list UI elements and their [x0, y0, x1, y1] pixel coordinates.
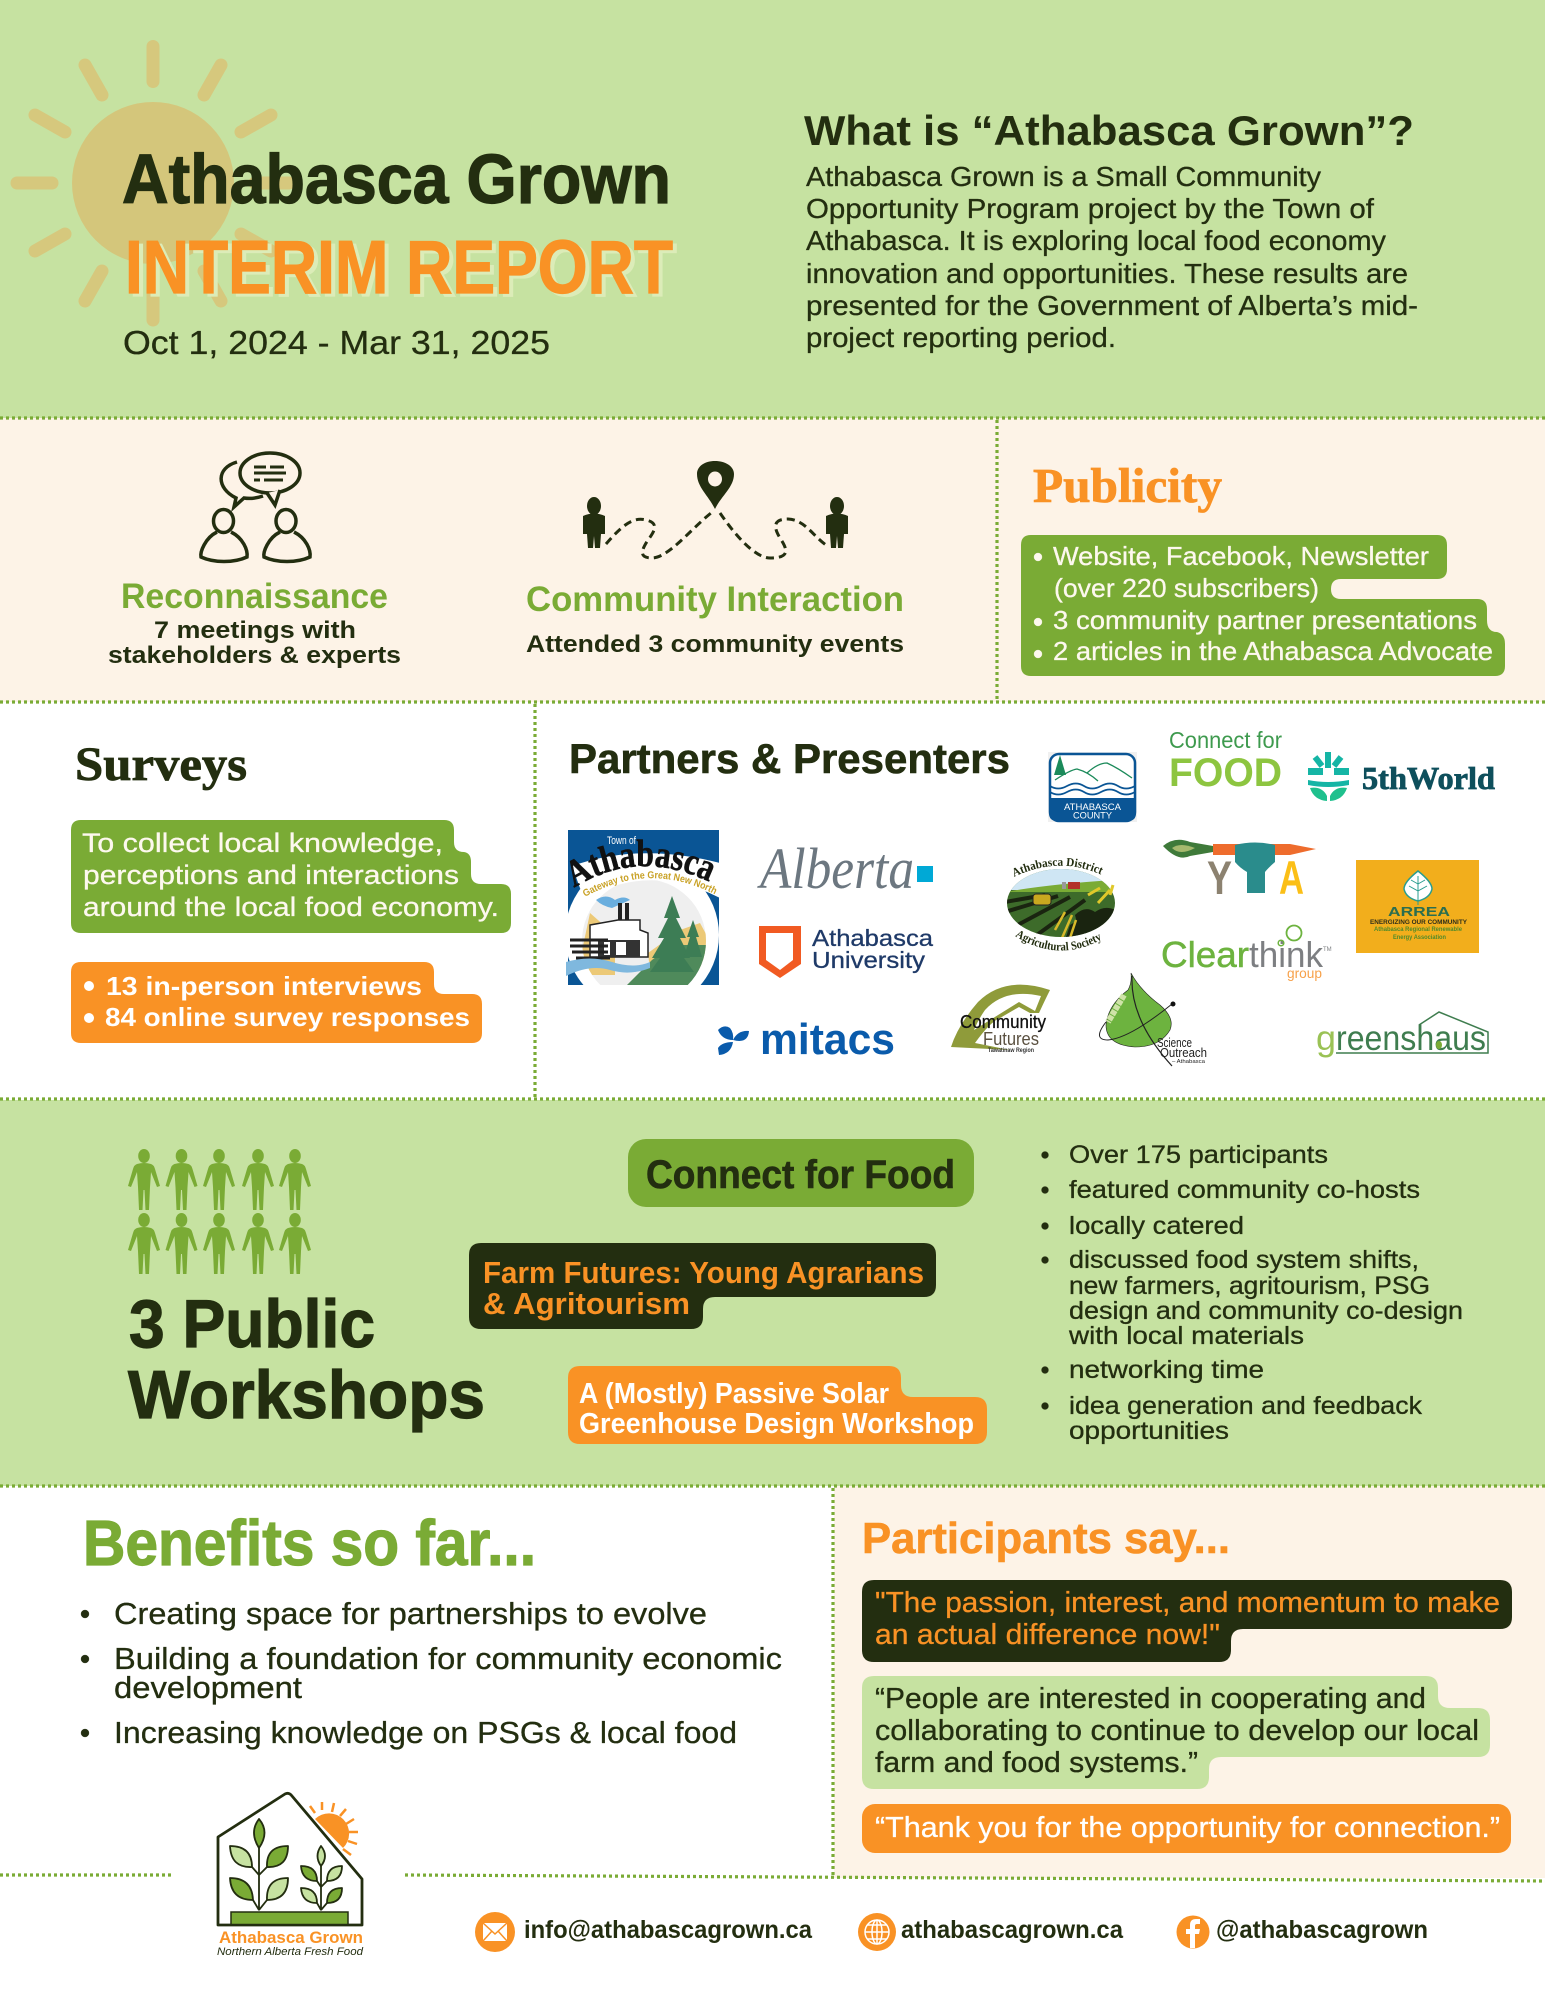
- logo: Athabasca University: University: [812, 947, 926, 973]
- logo: Athabasca University: Athabasca: [812, 925, 933, 951]
- publicity callout: 2 articles in the Athabasca Advocate: [1053, 636, 1493, 666]
- workshop details list: with local materials: [1068, 1322, 1304, 1350]
- workshop details list: Over 175 participants: [1069, 1141, 1328, 1169]
- logo: Science Outreach: – Athabasca: [1172, 1059, 1205, 1065]
- workshop: Connect for Food: Connect for Food: [646, 1153, 955, 1197]
- heading: participants say: Participants say...: [862, 1514, 1230, 1563]
- surveys numbers callout: [71, 962, 482, 1043]
- workshop details list: opportunities: [1069, 1417, 1229, 1445]
- logo: Athabasca County: [1048, 752, 1137, 822]
- logo: Science Outreach: Outreach: [1160, 1045, 1207, 1060]
- logo: Connect for Food: Connect for: [1169, 727, 1282, 753]
- workshop: Passive Solar Greenhouse: Greenhouse Design Workshop: [579, 1408, 974, 1440]
- quote: cooperating and collaborating: collaborating to continue to develop our local: [875, 1715, 1479, 1747]
- title: [122, 140, 677, 312]
- logo: Community Futures: Tawatinaw Region: [988, 1048, 1034, 1054]
- icon: map pin with dashed route and two people: [583, 461, 848, 558]
- logo: Connect for Food: [1169, 727, 1282, 795]
- surveys purpose callout: To collect local knowledge,: [82, 828, 443, 858]
- logo: YTA carrot fist: A: [1279, 851, 1304, 904]
- intro paragraph: Athabasca Grown is a Small Community: [806, 161, 1321, 192]
- intro paragraph: Athabasca. It is exploring local food economy: [806, 225, 1386, 256]
- heading: what is Athabasca Grown: What is “Athabasca Grown”?: [804, 107, 1414, 154]
- workshop details list: idea generation and feedback: [1069, 1392, 1423, 1420]
- contact: website: [858, 1913, 1124, 1951]
- logo: YTA carrot fist: Y: [1207, 851, 1232, 904]
- heading: partners and presenters: Partners & Presenters: [569, 735, 1010, 782]
- logo: Clearthink group: group: [1287, 965, 1322, 981]
- logo: Community Futures: [951, 985, 1050, 1054]
- logo: Athabasca County: ATHABASCA: [1064, 802, 1122, 813]
- heading: reconnaissance: Reconnaissance: [121, 577, 388, 616]
- community interaction text: Attended 3 community events: [526, 631, 904, 658]
- quote: passion and momentum: an actual difference now!": [875, 1619, 1220, 1651]
- heading: publicity: Publicity: [1033, 458, 1223, 513]
- logo: Town of Athabasca: Athabasca: [570, 839, 714, 888]
- icon: rows of people: [128, 1149, 311, 1274]
- logo: Athabasca Grown greenhouse: [217, 1793, 364, 1958]
- benefits list: development: [114, 1670, 302, 1705]
- benefits list: Increasing knowledge on PSGs & local food: [114, 1715, 737, 1750]
- workshop details list: [1042, 1141, 1463, 1445]
- quote: thank you: [862, 1804, 1511, 1853]
- surveys purpose callout: [71, 820, 511, 933]
- logo: ARREA: Athabasca Regional Renewable: [1374, 927, 1463, 933]
- logo: 5thWorld: [1308, 752, 1495, 801]
- workshop details list: discussed food system shifts,: [1069, 1246, 1419, 1274]
- workshop details list: networking time: [1069, 1356, 1264, 1384]
- heading: 3 public workshops: Workshops: [128, 1357, 485, 1433]
- workshop details list: new farmers, agritourism, PSG: [1069, 1272, 1430, 1300]
- benefits list: [81, 1596, 782, 1750]
- logo: Athabasca University: [759, 925, 933, 978]
- quote: cooperating and collaborating: farm and food systems.”: [875, 1747, 1198, 1779]
- logo: Community Futures: Community: [960, 1012, 1046, 1032]
- surveys purpose callout: perceptions and interactions: [83, 860, 459, 890]
- cream band panel: [0, 418, 1545, 702]
- logo: Science Outreach: Science: [1157, 1035, 1192, 1050]
- logo: mitacs: mitacs: [760, 1015, 895, 1064]
- logo: greenshaus: reenshaus: [1336, 1019, 1486, 1058]
- heading: benefits so far: Benefits so far...: [83, 1507, 536, 1579]
- benefits list: Building a foundation for community economic: [114, 1641, 782, 1676]
- logo: ARREA: ARREA: [1388, 904, 1451, 919]
- publicity callout: (over 220 subscribers): [1054, 573, 1319, 603]
- quote: cooperating and collaborating: [862, 1676, 1490, 1789]
- benefits list: Creating space for partnerships to evolve: [114, 1596, 707, 1631]
- quote: passion and momentum: [862, 1580, 1512, 1662]
- reconnaissance text: [108, 617, 401, 669]
- logo: Science Outreach: [1099, 973, 1207, 1066]
- reconnaissance text: 7 meetings with: [154, 617, 356, 644]
- surveys purpose callout: around the local food economy.: [83, 892, 499, 922]
- logo: greenshaus: g: [1316, 1019, 1336, 1058]
- logo: Agricultural Society: Athabasca District: [1014, 858, 1103, 877]
- logo: Agricultural Society: [1007, 858, 1115, 951]
- workshop: Passive Solar Greenhouse: [568, 1366, 987, 1444]
- intro paragraph: innovation and opportunities. These results are: [806, 258, 1408, 289]
- surveys numbers callout: 84 online survey responses: [105, 1002, 470, 1032]
- surveys numbers callout: 13 in-person interviews: [106, 971, 422, 1001]
- logo: Clearthink group: Clear: [1161, 934, 1249, 975]
- publicity callout: 3 community partner presentations: [1053, 605, 1477, 635]
- report dates: Oct 1, 2024 - Mar 31, 2025: [123, 324, 550, 361]
- logo: Town of Athabasca: [566, 830, 719, 985]
- workshop details list: featured community co-hosts: [1069, 1176, 1420, 1204]
- workshop: Passive Solar Greenhouse: A (Mostly) Passive Solar: [579, 1378, 889, 1410]
- quote: thank you: “Thank you for the opportunity for connection.”: [875, 1812, 1500, 1844]
- logo: Athabasca County: COUNTY: [1073, 810, 1113, 822]
- workshops background panel: [0, 1100, 1545, 1486]
- logo: 5thWorld: 5thWorld: [1362, 760, 1495, 796]
- logo: Agricultural Society: Agricultural Society: [1015, 930, 1100, 951]
- intro paragraph: presented for the Government of Alberta’s mid-: [806, 290, 1418, 321]
- icon: meeting people with speech bubbles: [201, 453, 310, 562]
- title: INTERIM REPORT: [129, 228, 677, 312]
- logo: Clearthink group: [1161, 926, 1332, 981]
- title: Athabasca Grown: [122, 140, 671, 218]
- logo: ARREA: ENERGIZING OUR COMMUNITY: [1370, 920, 1467, 926]
- heading: surveys: Surveys: [75, 738, 247, 791]
- workshop: Connect for Food: [628, 1139, 974, 1207]
- contact: email: [475, 1912, 813, 1952]
- heading: 3 public workshops: 3 Public: [129, 1286, 375, 1362]
- intro paragraph: project reporting period.: [806, 322, 1116, 353]
- heading: community interaction: Community Interaction: [526, 580, 904, 619]
- participants background panel: [834, 1486, 1545, 1878]
- logo: Town of Athabasca: Town of: [607, 835, 637, 847]
- logo: Clearthink group: TM: [1323, 947, 1332, 953]
- icon: sun: [17, 46, 289, 320]
- publicity callout: [1021, 535, 1505, 676]
- contact: website: athabascagrown.ca: [901, 1916, 1124, 1944]
- logo: Connect for Food: FOOD: [1169, 751, 1282, 795]
- intro paragraph: [806, 161, 1418, 353]
- logo: ARREA: [1356, 860, 1479, 953]
- quote: cooperating and collaborating: “People are interested in cooperating and: [875, 1683, 1426, 1715]
- publicity callout: Website, Facebook, Newsletter: [1053, 541, 1429, 571]
- contact: facebook: @athabascagrown: [1216, 1916, 1428, 1944]
- reconnaissance text: stakeholders & experts: [108, 642, 401, 669]
- quote: passion and momentum: "The passion, interest, and momentum to make: [875, 1587, 1500, 1619]
- contact: facebook: [1176, 1916, 1428, 1948]
- logo: Athabasca Grown greenhouse: Athabasca Grown: [219, 1928, 363, 1947]
- workshop: Farm Futures: Farm Futures: Young Agrarians: [483, 1255, 924, 1290]
- logo: Clearthink group: think: [1249, 934, 1324, 975]
- workshop: Farm Futures: & Agritourism: [483, 1286, 690, 1321]
- logo: Alberta: Alberta: [756, 836, 914, 901]
- logo: ARREA: Energy Association: [1393, 935, 1446, 941]
- intro paragraph: Opportunity Program project by the Town of: [806, 193, 1374, 224]
- heading: 3 public workshops: [128, 1286, 485, 1433]
- title: INTERIM REPORT: [125, 225, 673, 309]
- logo: YTA carrot fist: [1163, 840, 1316, 904]
- header background panel: [0, 0, 1545, 418]
- logo: Community Futures: Futures: [983, 1029, 1039, 1049]
- workshop details list: locally catered: [1069, 1212, 1244, 1240]
- workshop: Farm Futures: [469, 1243, 936, 1329]
- contact: email: info@athabascagrown.ca: [524, 1916, 813, 1944]
- logo: Athabasca Grown greenhouse: Northern Alberta Fresh Food: [217, 1946, 364, 1958]
- workshop details list: design and community co-design: [1069, 1297, 1463, 1325]
- logo: Town of Athabasca: Gateway to the Great New North: [583, 871, 716, 896]
